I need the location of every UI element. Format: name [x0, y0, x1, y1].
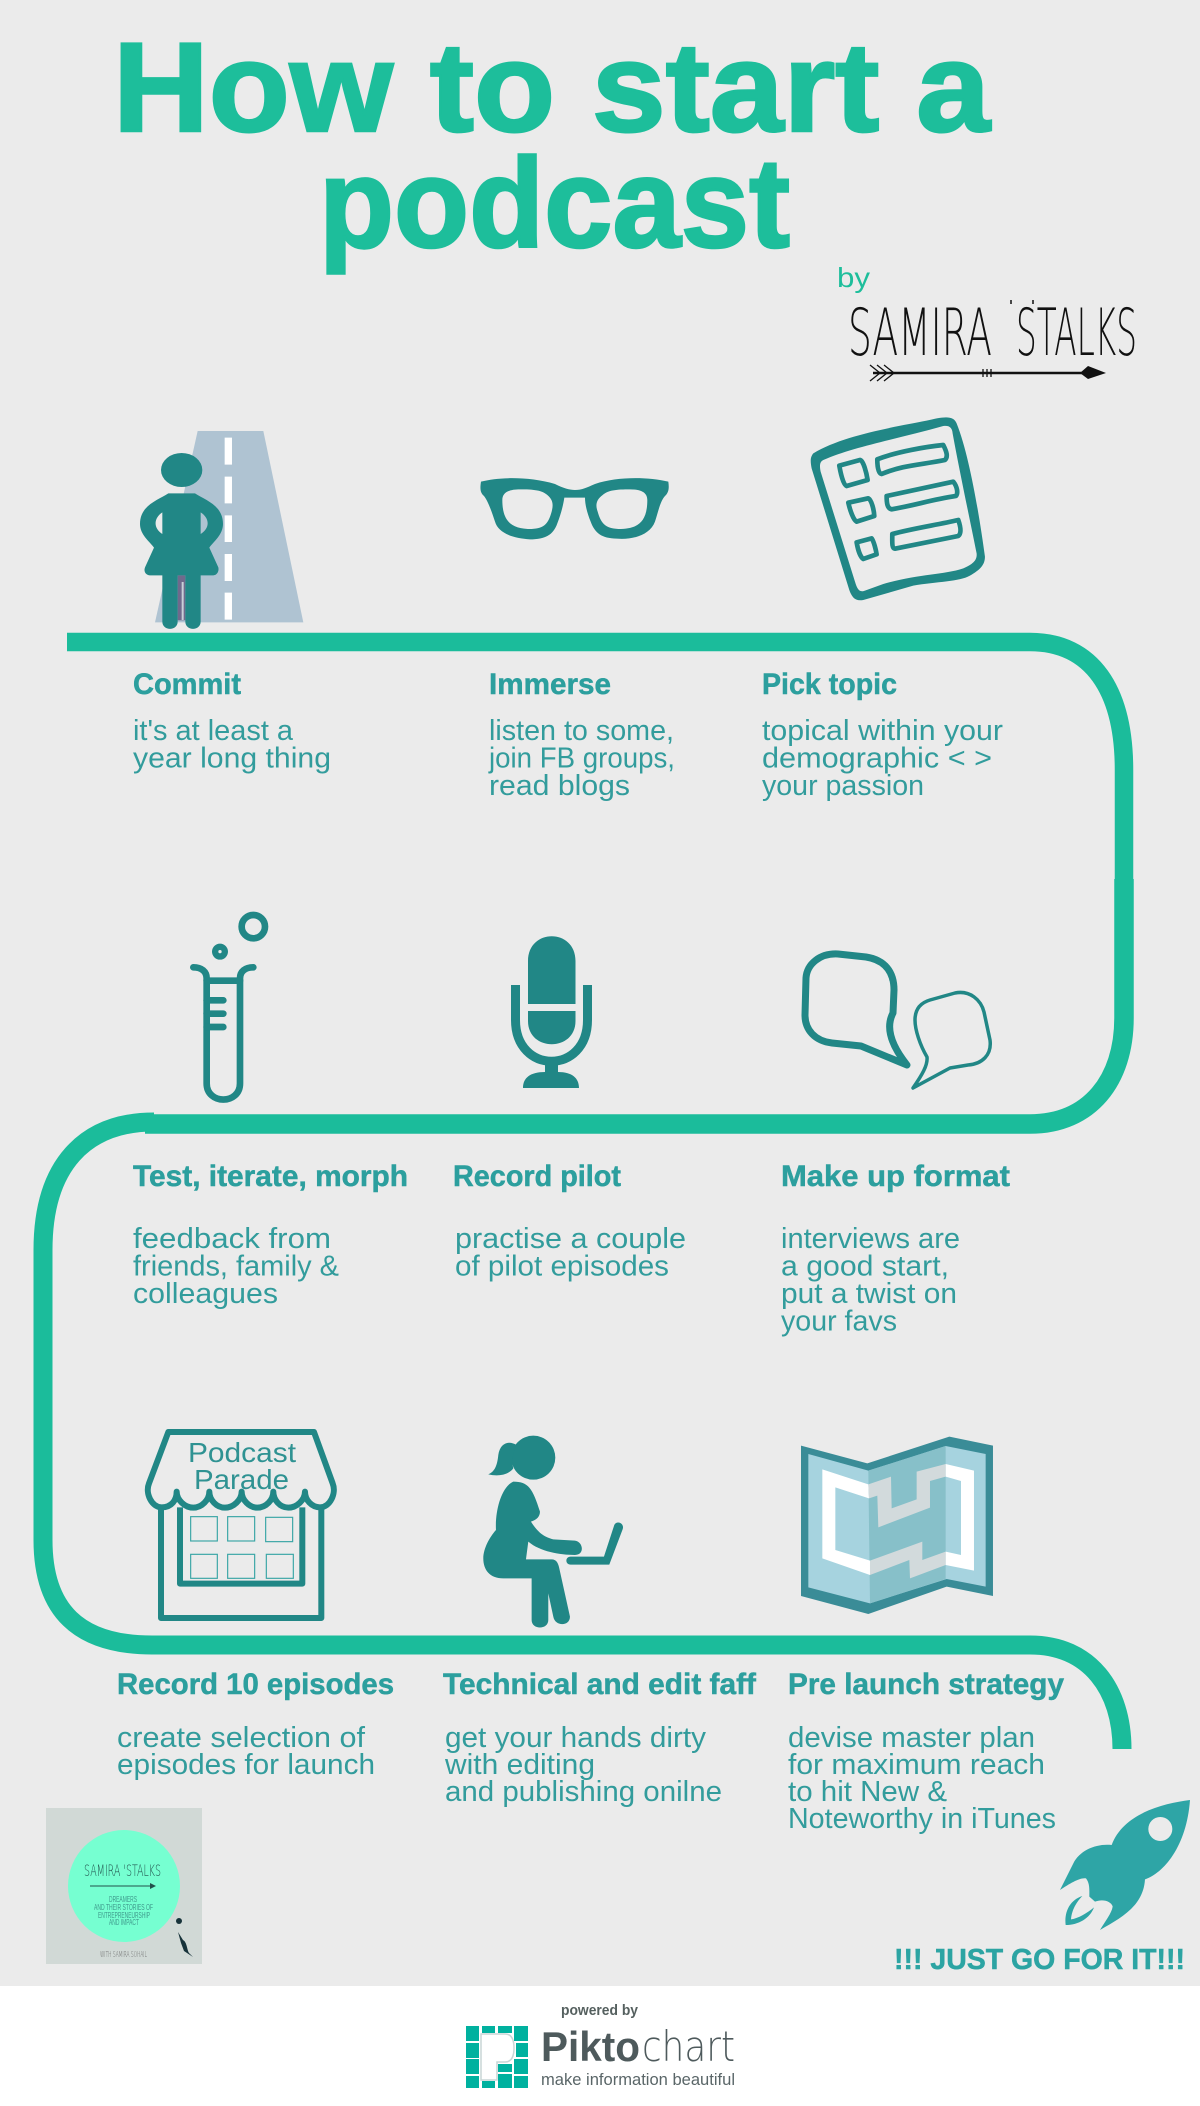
- description: a good start,: [781, 1250, 949, 1282]
- description: with editing: [444, 1749, 595, 1781]
- description: friends, family &: [133, 1250, 339, 1282]
- icon: glasses: [480, 478, 669, 539]
- description: [781, 1223, 960, 1338]
- podcast cover art: SAMIRA 'STALKS: [84, 1861, 161, 1880]
- call to action: !!! JUST GO FOR IT!!!: [894, 1944, 1185, 1976]
- icon: map: [801, 1437, 993, 1614]
- podcast cover art: AND THEIR STORIES OF: [94, 1903, 153, 1912]
- author logo: by Samira Stalks: [837, 262, 1137, 381]
- description: interviews are: [781, 1223, 960, 1255]
- icon: road and woman: [140, 431, 303, 629]
- description: read blogs: [489, 770, 630, 802]
- step: Pick topic: [762, 417, 1004, 802]
- description: your favs: [781, 1306, 897, 1338]
- icon: Podcast Parade store: Podcast: [188, 1437, 296, 1468]
- podcast cover art: AND IMPACT: [109, 1918, 139, 1927]
- description: [455, 1223, 686, 1282]
- step: Immerse: [480, 478, 675, 802]
- heading: Immerse: [489, 668, 611, 701]
- description: [762, 715, 1004, 802]
- title: podcast: [319, 132, 790, 274]
- heading: Pick topic: [762, 668, 897, 701]
- icon: document with list: [811, 417, 985, 600]
- description: and publishing onilne: [445, 1776, 722, 1808]
- author logo: by Samira Stalks: SAMIRA: [848, 296, 992, 371]
- description: [788, 1722, 1056, 1835]
- heading: Record pilot: [453, 1160, 621, 1193]
- description: [444, 1722, 722, 1808]
- description: your passion: [762, 770, 924, 802]
- description: join FB groups,: [488, 742, 675, 774]
- description: for maximum reach: [788, 1749, 1045, 1781]
- icon: woman at laptop: [483, 1436, 623, 1627]
- description: feedback from: [133, 1223, 331, 1255]
- description: to hit New &: [788, 1776, 947, 1808]
- description: Noteworthy in iTunes: [788, 1803, 1056, 1835]
- icon: Piktochart logo: [466, 2026, 528, 2088]
- podcast cover art: WITH SAMIRA SOHAIL: [100, 1950, 147, 1959]
- heading: Record 10 episodes: [117, 1668, 394, 1701]
- description: [133, 715, 331, 774]
- title: [113, 16, 991, 274]
- footer: powered by Piktochart: chart: [642, 2022, 735, 2071]
- description: topical within your: [762, 715, 1004, 747]
- heading: Make up format: [781, 1160, 1010, 1193]
- podcast cover art: DREAMERS: [109, 1895, 137, 1904]
- step: Make up format: [781, 954, 1010, 1338]
- description: [488, 715, 675, 802]
- icon: Podcast Parade store: [148, 1432, 334, 1618]
- footer: powered by Piktochart: Pikto: [541, 2023, 640, 2070]
- footer: powered by Piktochart: make information beautiful: [541, 2070, 735, 2089]
- description: get your hands dirty: [445, 1722, 707, 1754]
- description: year long thing: [133, 742, 331, 774]
- step: Record pilot: [453, 936, 686, 1282]
- icon: Podcast Parade store: Parade: [194, 1464, 289, 1495]
- step: Commit: [133, 431, 331, 774]
- description: demographic < >: [762, 742, 992, 774]
- step: Technical and edit faff: [443, 1436, 757, 1808]
- heading: Test, iterate, morph: [133, 1160, 408, 1193]
- description: listen to some,: [489, 715, 674, 747]
- description: [117, 1722, 375, 1781]
- title: How to start a: [113, 16, 991, 158]
- description: [133, 1223, 339, 1310]
- icon: microphone: [516, 936, 588, 1088]
- description: it's at least a: [133, 715, 293, 747]
- step: Test, iterate, morph: [133, 915, 408, 1310]
- heading: Technical and edit faff: [443, 1668, 757, 1701]
- winding path line: [43, 642, 1124, 1749]
- author logo: by Samira Stalks: by: [837, 262, 870, 293]
- icon: test tube: [193, 915, 265, 1100]
- description: of pilot episodes: [455, 1250, 669, 1282]
- description: create selection of: [117, 1722, 365, 1754]
- description: devise master plan: [788, 1722, 1035, 1754]
- description: colleagues: [133, 1278, 278, 1310]
- heading: Commit: [133, 668, 241, 701]
- podcast cover art: ENTREPRENEURSHIP: [98, 1911, 150, 1920]
- description: episodes for launch: [117, 1749, 375, 1781]
- footer: powered by Piktochart: [0, 1986, 1200, 2106]
- heading: Pre launch strategy: [788, 1668, 1064, 1701]
- footer: powered by Piktochart: powered by: [561, 2002, 639, 2019]
- podcast cover art: [46, 1808, 202, 1964]
- step: Record 10 episodes: [117, 1432, 394, 1781]
- description: practise a couple: [455, 1223, 686, 1255]
- icon: speech bubbles: [805, 954, 990, 1088]
- step: Pre launch strategy: [788, 1437, 1064, 1835]
- description: put a twist on: [781, 1278, 957, 1310]
- icon: rocket: [1060, 1800, 1190, 1930]
